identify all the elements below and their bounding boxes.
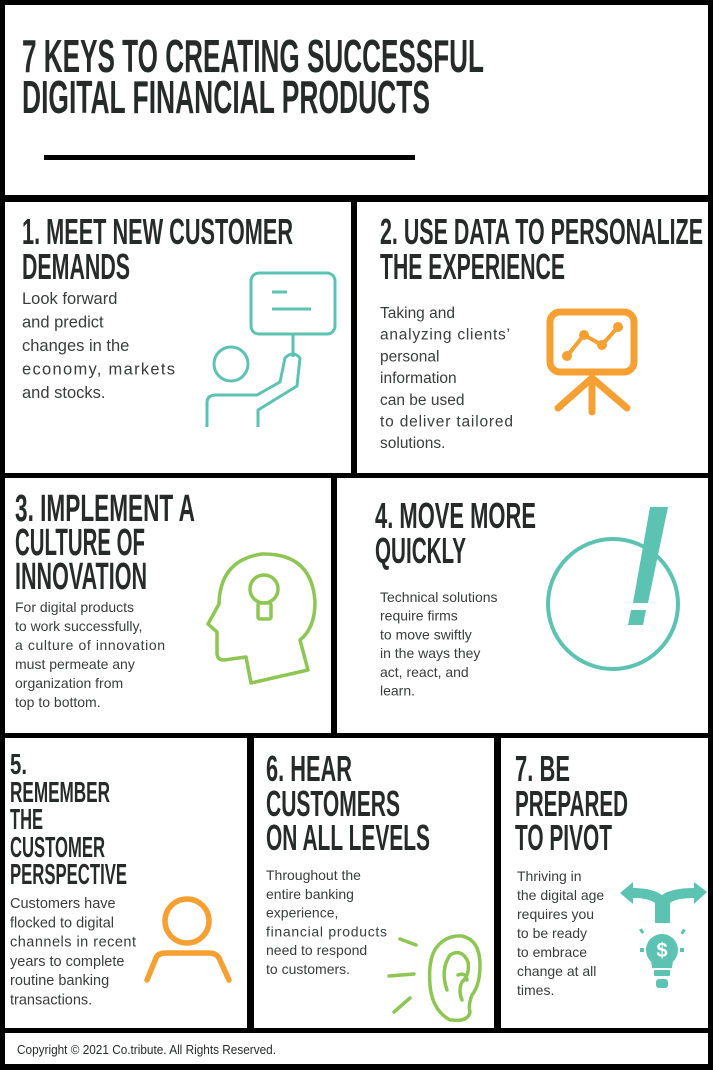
heading 3: INNOVATION: [15, 556, 147, 598]
text 4: require firms: [380, 608, 458, 624]
heading 5: PERSPECTIVE: [10, 859, 127, 891]
heading 3: CULTURE OF: [15, 522, 145, 564]
icon: head with bulb: [208, 554, 315, 683]
text 6: entire banking: [266, 886, 354, 902]
icon: chart board: [550, 312, 634, 412]
icon: pivot arrows and money bulb: [620, 882, 707, 988]
panel: 5 customer perspective: [5, 738, 247, 1028]
text 3: must permeate any: [15, 656, 135, 672]
heading 6: ON ALL LEVELS: [266, 817, 430, 858]
text 3: a culture of innovation: [15, 637, 165, 653]
heading 5: THE: [10, 804, 43, 836]
text 6: Throughout the: [266, 867, 361, 883]
title: DIGITAL FINANCIAL PRODUCTS: [22, 71, 430, 123]
panel: 6 hear customers: [254, 738, 494, 1028]
text 5: [10, 896, 136, 1008]
text 7: the digital age: [517, 887, 604, 903]
footer: [5, 1033, 708, 1064]
text 6: [266, 867, 387, 977]
heading 3: [15, 488, 195, 598]
text 4: learn.: [380, 682, 415, 698]
text 7: [517, 868, 604, 998]
text 4: [380, 589, 498, 698]
heading 1: 1. MEET NEW CUSTOMER: [22, 211, 293, 252]
text 1: changes in the: [22, 337, 129, 355]
heading 6: 6. HEAR: [266, 748, 352, 789]
panel: 3 culture of innovation: [5, 478, 331, 733]
heading 7: 7. BE: [515, 748, 570, 789]
text 7: change at all: [517, 963, 596, 979]
panel: title: [5, 5, 708, 195]
text 1: Look forward: [22, 290, 117, 308]
heading 2: [380, 211, 703, 287]
text 3: [15, 599, 165, 710]
heading 1: DEMANDS: [22, 246, 130, 287]
heading 1: [22, 211, 293, 287]
heading 4: QUICKLY: [375, 530, 466, 571]
heading 6: [266, 748, 430, 858]
panel: 7 prepared to pivot: [501, 738, 708, 1028]
text 5: channels in recent: [10, 935, 136, 951]
icon: ear: [389, 936, 480, 1020]
text 6: to customers.: [266, 961, 350, 977]
text 2: personal: [380, 348, 439, 365]
icon: exclamation circle: [548, 507, 678, 669]
heading 5: REMEMBER: [10, 777, 110, 809]
text 2: Taking and: [380, 305, 455, 322]
heading 6: CUSTOMERS: [266, 783, 400, 824]
panel: 2 use data to personalize: [357, 202, 708, 473]
text 6: experience,: [266, 905, 338, 921]
text 6: financial products: [266, 923, 387, 939]
text 2: can be used: [380, 392, 464, 409]
panel: 4 move more quickly: [337, 478, 708, 733]
text 4: Technical solutions: [380, 589, 498, 605]
heading 7: [515, 748, 628, 858]
panel: 1 meet new customer demands: [5, 202, 351, 473]
text 5: Customers have: [10, 896, 116, 912]
text 1: [22, 290, 175, 402]
text 7: to be ready: [517, 925, 587, 941]
text 5: transactions.: [10, 992, 92, 1008]
text 1: economy, markets: [22, 360, 175, 378]
copyright text: Copyright © 2021 Co.tribute. All Rights Reserved.: [17, 1042, 276, 1057]
text 2: solutions.: [380, 435, 445, 452]
heading 5: 5.: [10, 749, 27, 781]
text 4: to move swiftly: [380, 626, 472, 642]
heading 4: [375, 495, 536, 571]
text 3: to work successfully,: [15, 618, 142, 634]
heading 5: CUSTOMER: [10, 832, 105, 864]
heading 3: 3. IMPLEMENT A: [15, 488, 195, 530]
text 1: and predict: [22, 314, 104, 332]
text 7: requires you: [517, 906, 594, 922]
text 7: to embrace: [517, 944, 587, 960]
title: [22, 30, 484, 123]
text 5: flocked to digital: [10, 915, 114, 931]
icon: pivot arrows and money bulb: $: [656, 940, 668, 962]
heading 2: THE EXPERIENCE: [380, 246, 565, 287]
text 3: For digital products: [15, 599, 134, 615]
text 2: analyzing clients’: [380, 327, 510, 344]
heading 7: TO PIVOT: [515, 817, 612, 858]
text 3: organization from: [15, 675, 123, 691]
text 5: routine banking: [10, 973, 109, 989]
text 3: top to bottom.: [15, 694, 101, 710]
icon: person: [147, 899, 229, 980]
text 7: Thriving in: [517, 868, 582, 884]
text 4: act, react, and: [380, 664, 469, 680]
text 1: and stocks.: [22, 384, 105, 402]
text 5: years to complete: [10, 954, 124, 970]
heading 5: [10, 749, 127, 891]
heading 7: PREPARED: [515, 783, 628, 824]
text 2: to deliver tailored: [380, 414, 513, 430]
text 2: information: [380, 370, 457, 387]
icon: presenter: [207, 273, 335, 427]
text 4: in the ways they: [380, 645, 480, 661]
text 7: times.: [517, 982, 554, 998]
text 6: need to respond: [266, 942, 367, 958]
heading 4: 4. MOVE MORE: [375, 495, 536, 536]
text 2: [380, 305, 513, 452]
